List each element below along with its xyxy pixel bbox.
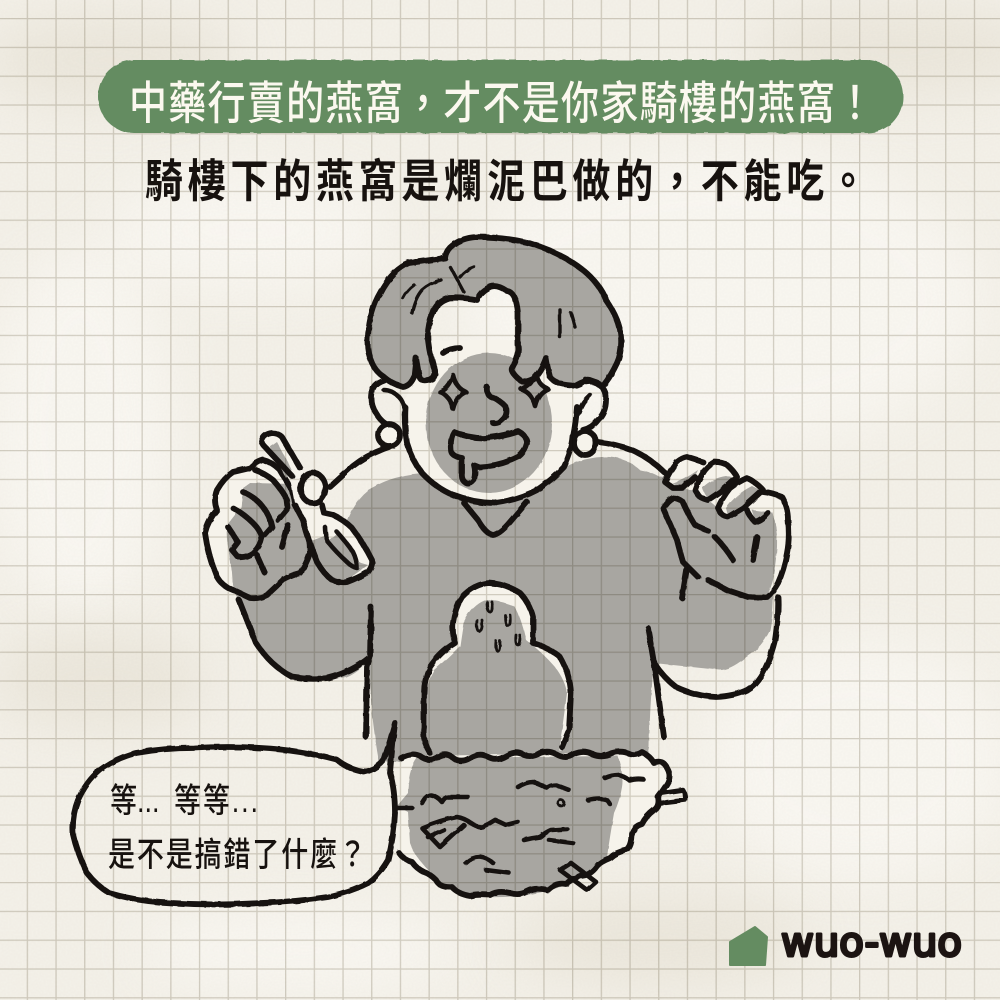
arm and body outlines	[239, 597, 778, 737]
bird nest	[397, 752, 685, 897]
spoon	[262, 433, 372, 582]
speech bubble	[73, 723, 395, 904]
title text: 中藥行賣的燕窩，才不是你家騎樓的燕窩！	[129, 78, 874, 129]
speech bubble text	[108, 782, 366, 874]
title banner	[98, 60, 903, 133]
left eye star	[440, 375, 466, 409]
right eye star	[521, 372, 548, 406]
nest straw scribbles	[397, 775, 643, 873]
illustration: woman holding spoon	[73, 237, 789, 904]
icon: house	[730, 927, 767, 965]
nest twigs	[560, 790, 685, 890]
eyebrows	[443, 347, 542, 353]
nose	[487, 387, 506, 423]
neck collar	[464, 502, 527, 535]
subtitle: 騎樓下的燕窩是爛泥巴做的，不能吃。	[145, 156, 867, 207]
right hand	[663, 457, 789, 598]
shoulder lines	[330, 442, 665, 487]
face	[405, 340, 577, 535]
bird figurine	[424, 583, 571, 755]
left hand	[205, 460, 310, 598]
sweater and arms shading	[227, 457, 777, 762]
earrings	[378, 424, 596, 455]
brand name: wuo-wuo	[781, 920, 962, 966]
speech bubble text: 等等...	[174, 782, 258, 820]
speech bubble text: 是不是搞錯了什麼？	[108, 836, 366, 874]
speech bubble text: 等...	[110, 782, 159, 820]
mouth with drool	[451, 431, 527, 484]
logo	[730, 920, 962, 966]
ears	[372, 380, 606, 430]
sweat drops	[477, 602, 520, 651]
hair	[368, 237, 621, 387]
